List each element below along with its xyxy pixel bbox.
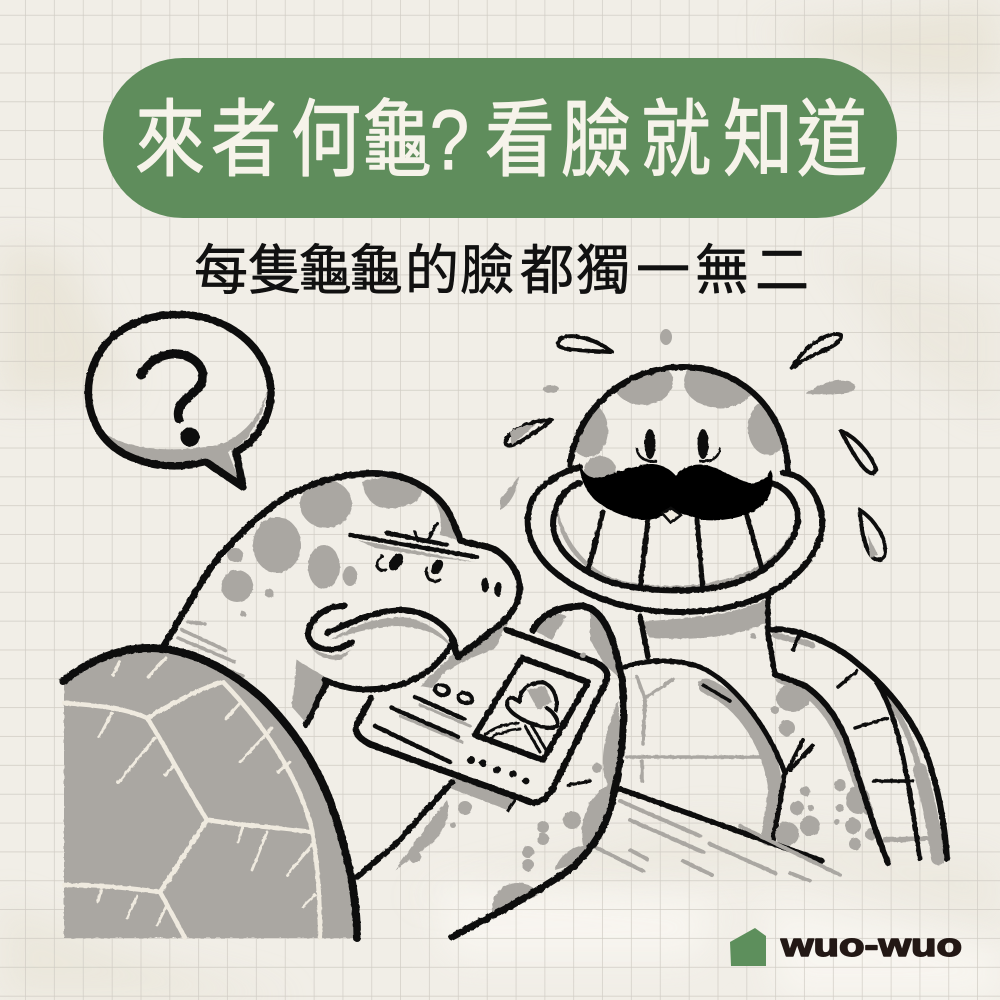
arm line of left turtle bbox=[357, 782, 452, 877]
rim outer bbox=[528, 467, 822, 612]
card text lines bbox=[375, 697, 464, 762]
sweat drops bbox=[500, 334, 885, 560]
body spots bbox=[750, 633, 877, 850]
subtitle: 每隻龜龜的臉都獨一無二 bbox=[194, 241, 809, 301]
id card bbox=[356, 630, 607, 810]
flipper holding card bbox=[357, 606, 624, 937]
neck ridges bbox=[172, 622, 243, 676]
eyes bbox=[644, 429, 656, 459]
flipper outline bbox=[452, 606, 624, 937]
teeth lines bbox=[588, 512, 762, 591]
mouth shading bbox=[557, 505, 798, 591]
shadow under card bbox=[447, 777, 517, 810]
logo house icon bbox=[730, 928, 766, 966]
body line bbox=[620, 789, 822, 861]
shell scute lines bbox=[64, 682, 320, 938]
left turtle bbox=[63, 473, 520, 938]
mustache bbox=[579, 462, 772, 520]
motion lines bbox=[597, 801, 840, 881]
title text: 來者何龜?看臉就知道 bbox=[135, 94, 867, 187]
right shell shading bbox=[780, 678, 868, 810]
small gray droplets bbox=[543, 385, 559, 393]
head outline bbox=[163, 473, 520, 657]
card buttons bbox=[434, 683, 450, 697]
neck bbox=[640, 598, 768, 639]
nose bbox=[662, 508, 681, 523]
title banner bbox=[103, 58, 897, 218]
card outline bbox=[356, 630, 607, 802]
head outline bbox=[570, 367, 788, 473]
mouth inner bbox=[553, 483, 798, 590]
head spots bbox=[221, 477, 458, 617]
shell bbox=[64, 648, 357, 938]
head spots bbox=[575, 370, 782, 478]
right turtle bbox=[528, 356, 947, 881]
speech bubble with question mark bbox=[88, 315, 271, 487]
flipper spots bbox=[395, 612, 622, 912]
question mark bbox=[141, 354, 203, 446]
nostrils bbox=[481, 578, 489, 592]
brow and mouth shading bbox=[292, 540, 510, 725]
shell outline bbox=[63, 648, 357, 938]
right shell outline bbox=[770, 629, 947, 863]
logo text: wuo-wuo bbox=[780, 927, 962, 963]
plastron bbox=[627, 677, 777, 781]
brows and eyes bbox=[350, 523, 477, 581]
mouth and cheek bbox=[306, 606, 455, 725]
card dots bbox=[467, 756, 529, 784]
card photo bbox=[475, 658, 588, 760]
logo bbox=[730, 927, 962, 966]
